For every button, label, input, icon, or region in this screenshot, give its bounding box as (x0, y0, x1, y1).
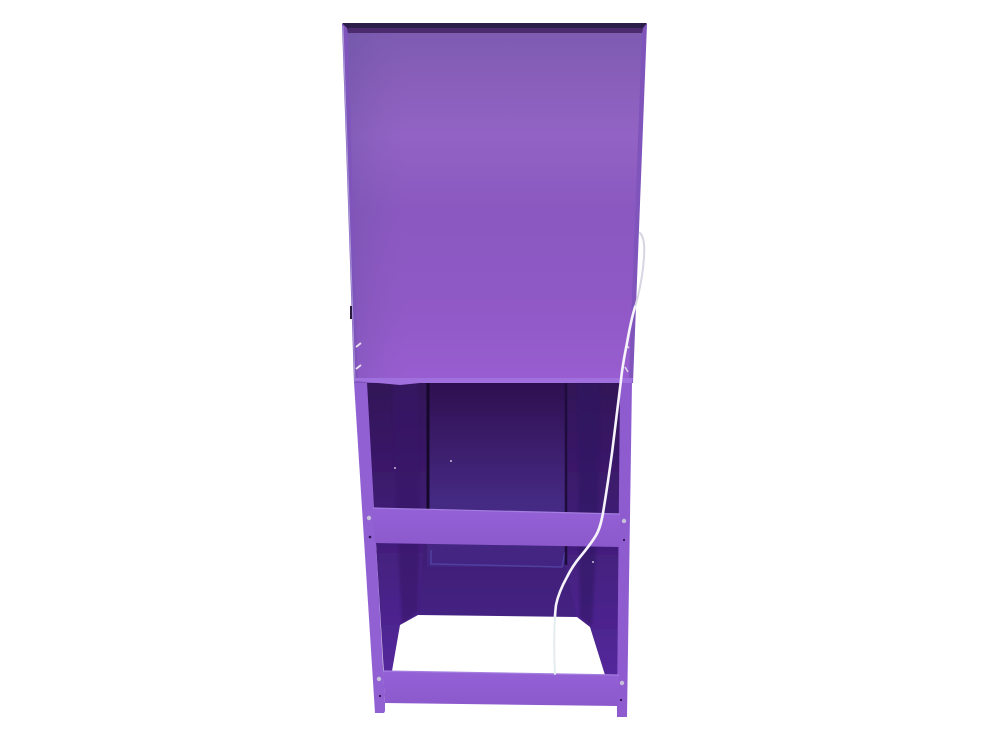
dark top rim (342, 23, 647, 33)
upper back panel (342, 23, 647, 385)
bottom crossbar top edge (383, 671, 619, 675)
dent marks (362, 213, 617, 215)
lower frame (354, 382, 632, 717)
top lip shade (347, 28, 643, 33)
panel main face (348, 33, 642, 378)
panel bottom lip (355, 378, 633, 385)
door left edge (426, 383, 430, 510)
right leg (617, 382, 632, 717)
cord loop at panel edge (635, 233, 644, 307)
door right edge (565, 383, 567, 565)
panel left edge highlight (343, 26, 355, 382)
left dark clip (350, 306, 352, 319)
right inner side wall (566, 383, 621, 676)
middle crossbar (373, 508, 620, 547)
right side pins (625, 345, 629, 372)
central door panel (427, 383, 566, 567)
screws (367, 460, 626, 685)
left inner side wall (367, 383, 427, 672)
cord over floor (553, 617, 556, 674)
right side panel fold (577, 383, 600, 625)
left side pins (356, 343, 361, 369)
middle crossbar top edge (373, 508, 620, 514)
left side panel fold (392, 383, 420, 624)
panel left shading (348, 33, 642, 378)
panel outer frame (342, 24, 647, 383)
interior back wall (366, 383, 621, 676)
left leg (354, 382, 385, 713)
bottom crossbar (383, 671, 619, 706)
power cord (554, 233, 644, 674)
screw holes (369, 536, 625, 701)
floor opening (392, 615, 605, 675)
cord main run (555, 307, 635, 617)
door panel lower rim (431, 550, 565, 567)
